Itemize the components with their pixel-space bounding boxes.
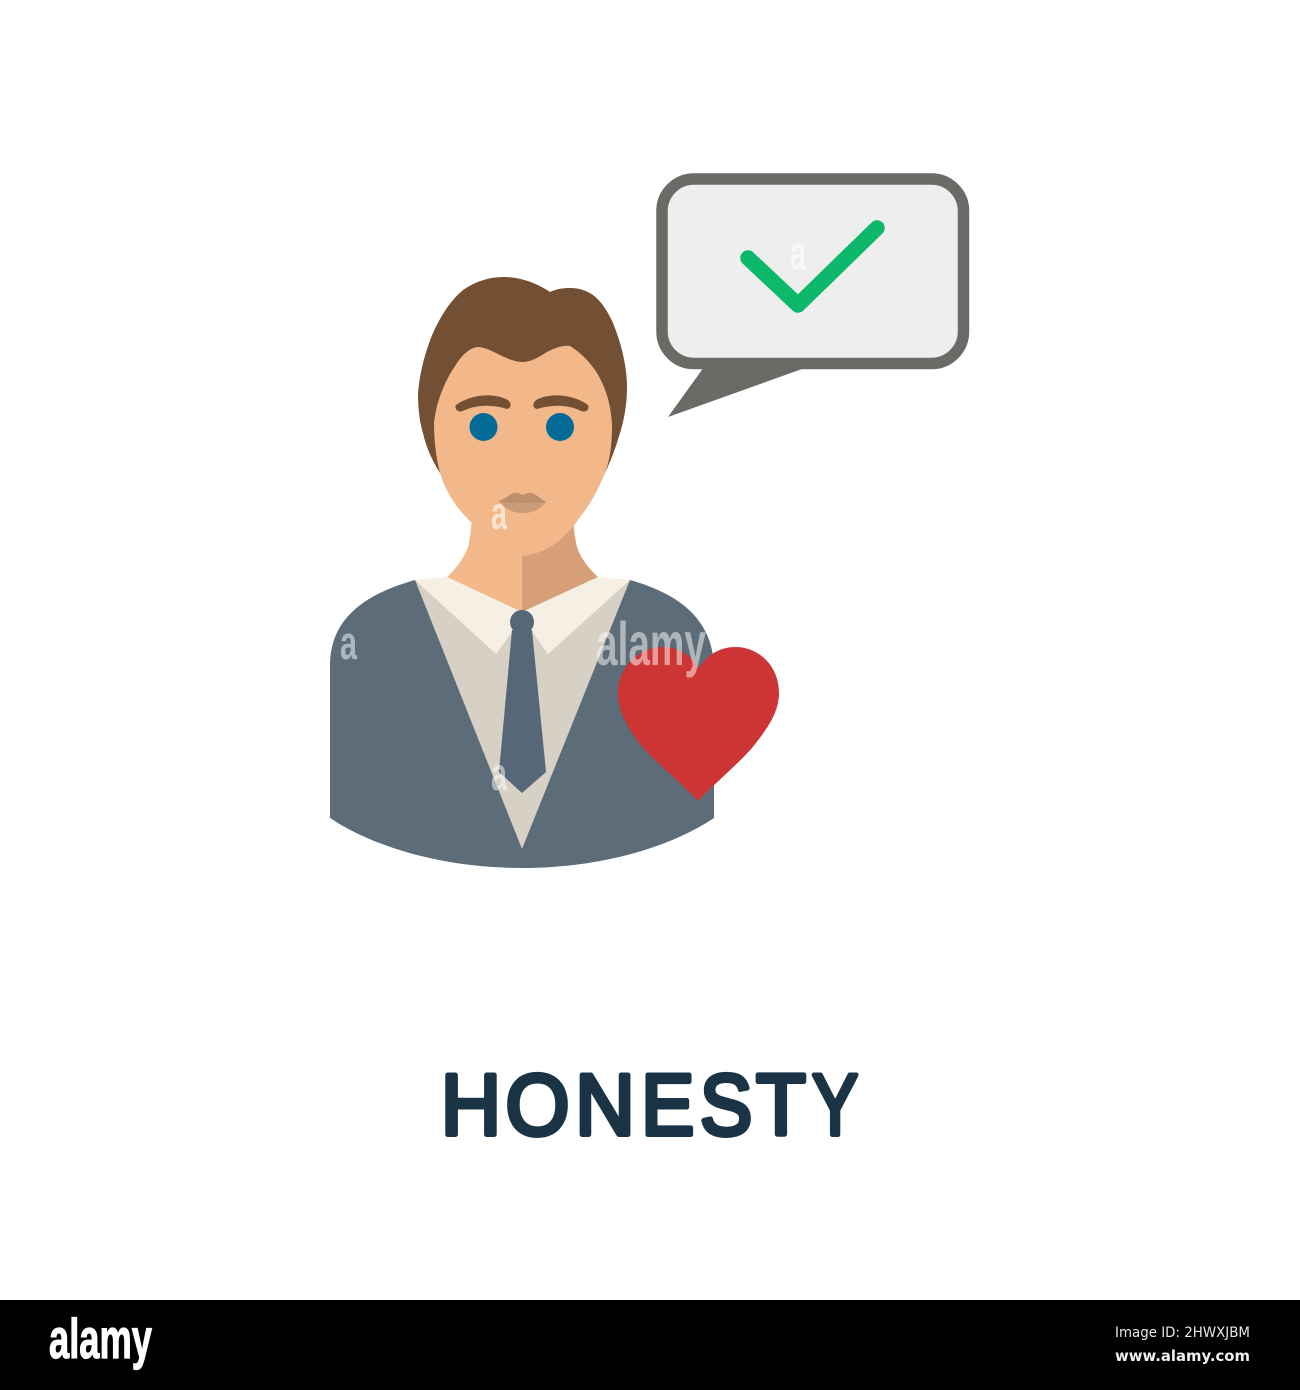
right eyebrow [533,395,589,412]
watermark: a tie: a [491,748,507,800]
shirt collar [415,577,630,654]
left eye [470,413,498,441]
icon: green check mark [748,228,877,305]
icon: man in suit [330,277,714,868]
neck [447,515,598,612]
lips [499,493,546,513]
title: Y [812,1058,858,1154]
title: H [441,1058,501,1154]
suit jacket [330,580,714,868]
hair [418,277,627,473]
title: N [575,1058,635,1154]
necktie [499,610,546,793]
title: O [506,1058,569,1154]
right eye [546,413,574,441]
website: www.alamy.com [1115,1347,1250,1365]
image id: Image ID: 2HWXJBM [1115,1325,1250,1341]
watermark: a chin: a [491,487,507,539]
neck shadow [522,523,598,612]
watermark: alamy: alamy [596,610,706,678]
title: E [641,1058,694,1154]
shirt [415,580,630,849]
face [434,346,612,556]
icon: speech bubble with check mark [662,179,964,417]
footer bar [0,1300,1300,1390]
footer logo: alamy [49,1307,152,1370]
left eyebrow [455,395,511,412]
title [441,1058,858,1154]
icon: red heart [618,647,779,801]
title: S [700,1058,752,1154]
title: T [756,1058,806,1154]
watermark: a left: a [340,616,358,669]
watermark: a bubble: a [790,227,806,279]
